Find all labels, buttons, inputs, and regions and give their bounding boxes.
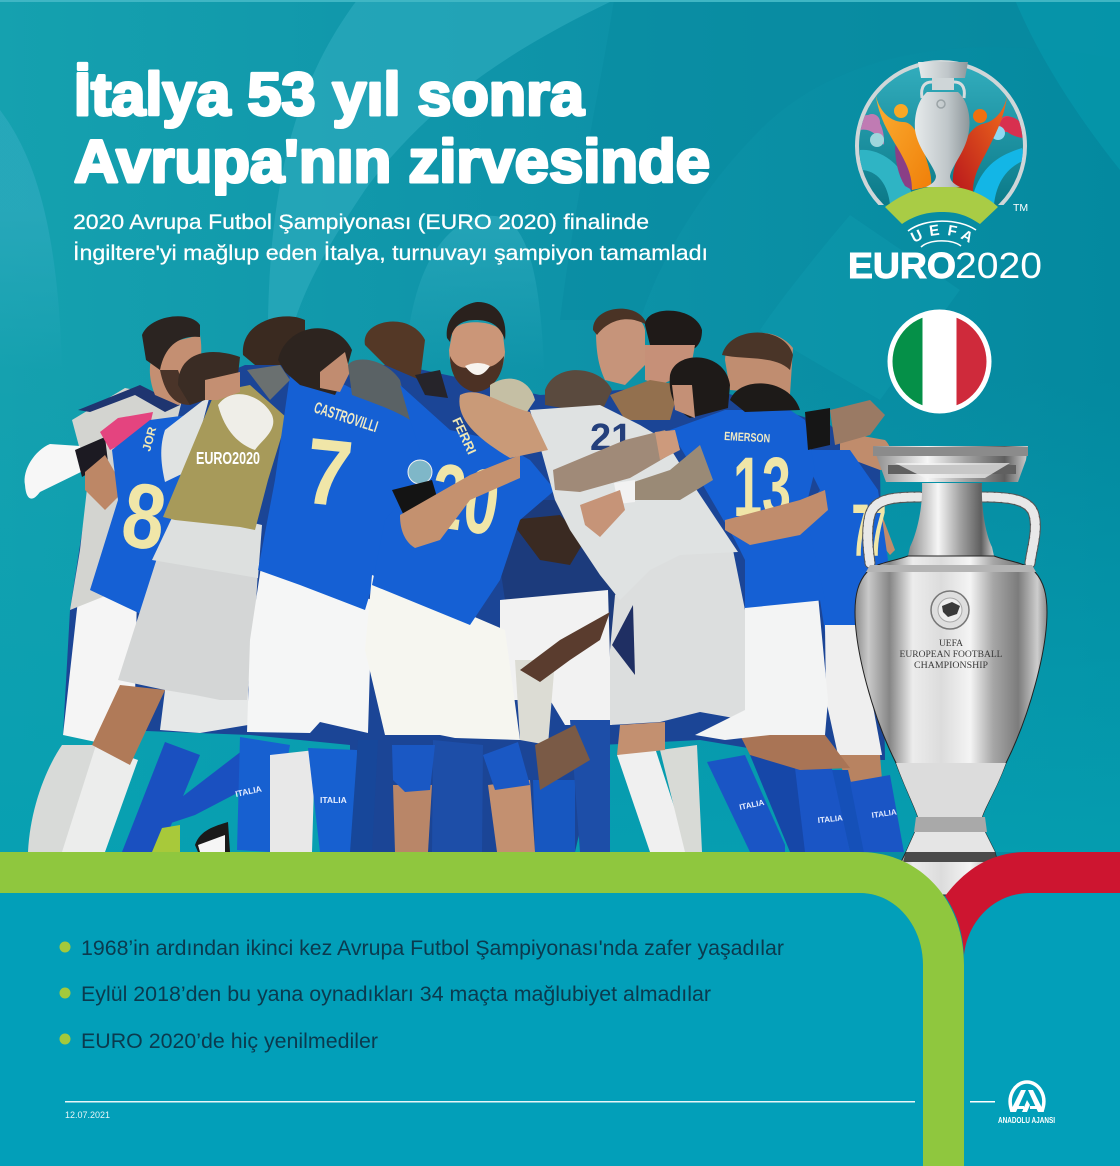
players photo group xyxy=(25,302,905,858)
player 21 in white kit xyxy=(530,405,745,852)
logo wordmark: U xyxy=(908,227,925,247)
right player: 77 xyxy=(852,489,886,572)
trophy inscription xyxy=(900,639,1003,671)
player 7 Castrovilli xyxy=(234,328,437,852)
logo green arc xyxy=(885,186,998,224)
player 20 xyxy=(350,385,555,852)
player number 8: 8 xyxy=(116,464,172,570)
trophy handles xyxy=(868,497,1035,563)
player 20: 20 xyxy=(424,445,505,555)
Anadolu Ajansi logo xyxy=(970,1082,1055,1125)
logo: UEFA EURO 2020 xyxy=(848,62,1042,286)
logo wordmark: E xyxy=(928,222,940,240)
trophy inscription: CHAMPIONSHIP xyxy=(914,661,988,671)
logo wordmark: 2020 xyxy=(955,245,1042,286)
trophy lid xyxy=(873,446,1028,482)
player number 8 xyxy=(90,415,188,616)
red band xyxy=(945,852,1120,955)
logo trophy xyxy=(915,62,970,187)
subtitle: İngiltere'yi mağlup eden İtalya, turnuvayı şampiyon tamamladı xyxy=(73,241,708,265)
bullet list xyxy=(60,936,784,1053)
footer rule xyxy=(65,1101,915,1102)
trophy neck xyxy=(908,483,994,556)
player 13 Emerson: ITALIA xyxy=(739,798,765,812)
goalkeeper left xyxy=(25,316,201,852)
back heads xyxy=(243,302,793,420)
logo emblem ring xyxy=(855,60,1027,205)
player number 8: JOR xyxy=(139,425,159,453)
right player xyxy=(808,436,904,852)
player 13 Emerson: ITALIA xyxy=(817,813,843,825)
player 13 Emerson: EMERSON xyxy=(724,429,771,445)
player 21 in white kit: 21 xyxy=(590,417,632,459)
logo wordmark: EURO xyxy=(848,245,956,286)
subtitle: 2020 Avrupa Futbol Şampiyonası (EURO 2020) finalinde xyxy=(73,210,649,234)
player 7 Castrovilli: CASTROVILLI xyxy=(312,400,380,436)
date: 12.07.2021 xyxy=(65,1110,110,1120)
player with bib xyxy=(62,352,287,852)
bullet 3: EURO 2020’de hiç yenilmediler xyxy=(81,1029,378,1053)
player 7 Castrovilli: ITALIA xyxy=(234,784,263,799)
logo figures xyxy=(860,90,1025,205)
bullet 1: 1968’in ardından ikinci kez Avrupa Futbol Şampiyonası'nda zafer yaşadılar xyxy=(81,936,784,960)
Anadolu Ajansi logo: ANADOLU AJANSI xyxy=(998,1115,1055,1125)
logo wordmark xyxy=(848,202,1042,286)
arms across the huddle xyxy=(459,392,713,537)
title: Avrupa'nın zirvesinde xyxy=(74,128,710,195)
huddle underlay xyxy=(63,365,885,852)
title: İtalya 53 yıl sonra xyxy=(74,61,585,128)
logo wordmark: TM xyxy=(1013,202,1028,214)
bullet 2: Eylül 2018’den bu yana oynadıkları 34 maçta mağlubiyet almadılar xyxy=(81,982,711,1006)
italian flag xyxy=(888,310,992,414)
title xyxy=(74,61,710,195)
player 13 Emerson xyxy=(670,357,885,852)
trophy medallion xyxy=(931,591,969,629)
player 20: FERRI xyxy=(449,415,479,457)
green band xyxy=(0,852,964,1166)
subtitle xyxy=(73,210,708,265)
trophy body xyxy=(855,556,1047,895)
bottom panel xyxy=(0,893,1120,1166)
player with bib: EURO2020 xyxy=(196,448,260,468)
trophy inscription: EUROPEAN FOOTBALL xyxy=(900,650,1003,660)
right player: ITALIA xyxy=(871,808,897,820)
player 7 Castrovilli: ITALIA xyxy=(320,795,347,805)
player 13 Emerson: 13 xyxy=(733,440,791,534)
logo wordmark: A xyxy=(958,227,976,247)
trophy xyxy=(855,446,1047,895)
dark central mass xyxy=(500,500,616,852)
trophy inscription: UEFA xyxy=(939,639,963,649)
player 7 Castrovilli: 7 xyxy=(300,418,357,527)
logo wordmark: F xyxy=(946,222,958,241)
